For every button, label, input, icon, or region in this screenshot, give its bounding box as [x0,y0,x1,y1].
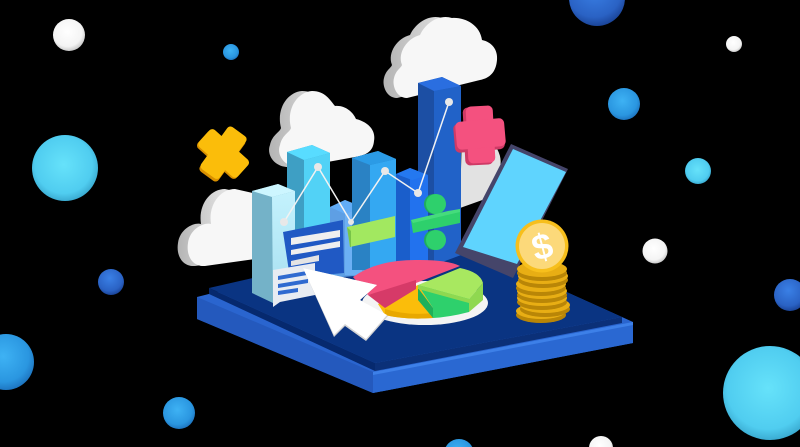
line chart [280,98,453,226]
platform base slab [197,235,633,393]
bar: blue [352,151,396,270]
bar: small mid blue [330,200,367,278]
icon: green divide sign [411,194,460,250]
cloud: lower left [178,189,262,266]
bar: pale blue [252,184,295,303]
bar: royal blue [396,168,428,270]
cloud: centre [269,91,374,167]
cursor arrow [303,268,388,341]
pie slice: pink [353,260,460,295]
cloud: top right [384,17,497,98]
pie slice: yellow [378,285,433,319]
bar: tall dark blue [418,77,461,265]
cloud: behind plus sign [460,130,501,208]
pie slice: dark green [418,285,469,318]
green minus bar [347,216,395,247]
pie plate [362,281,488,325]
icon: yellow multiply [195,125,251,183]
icon: dollar coin: $ [527,224,557,269]
pie slice: light green [418,268,483,299]
coin stack [516,220,570,323]
platform top slab [209,235,622,371]
tablet [455,144,568,278]
icon: pink plus [453,105,506,166]
pie chart [353,260,488,325]
bar: cyan [287,145,330,290]
chat bubble [273,263,315,307]
document panel [283,220,344,278]
